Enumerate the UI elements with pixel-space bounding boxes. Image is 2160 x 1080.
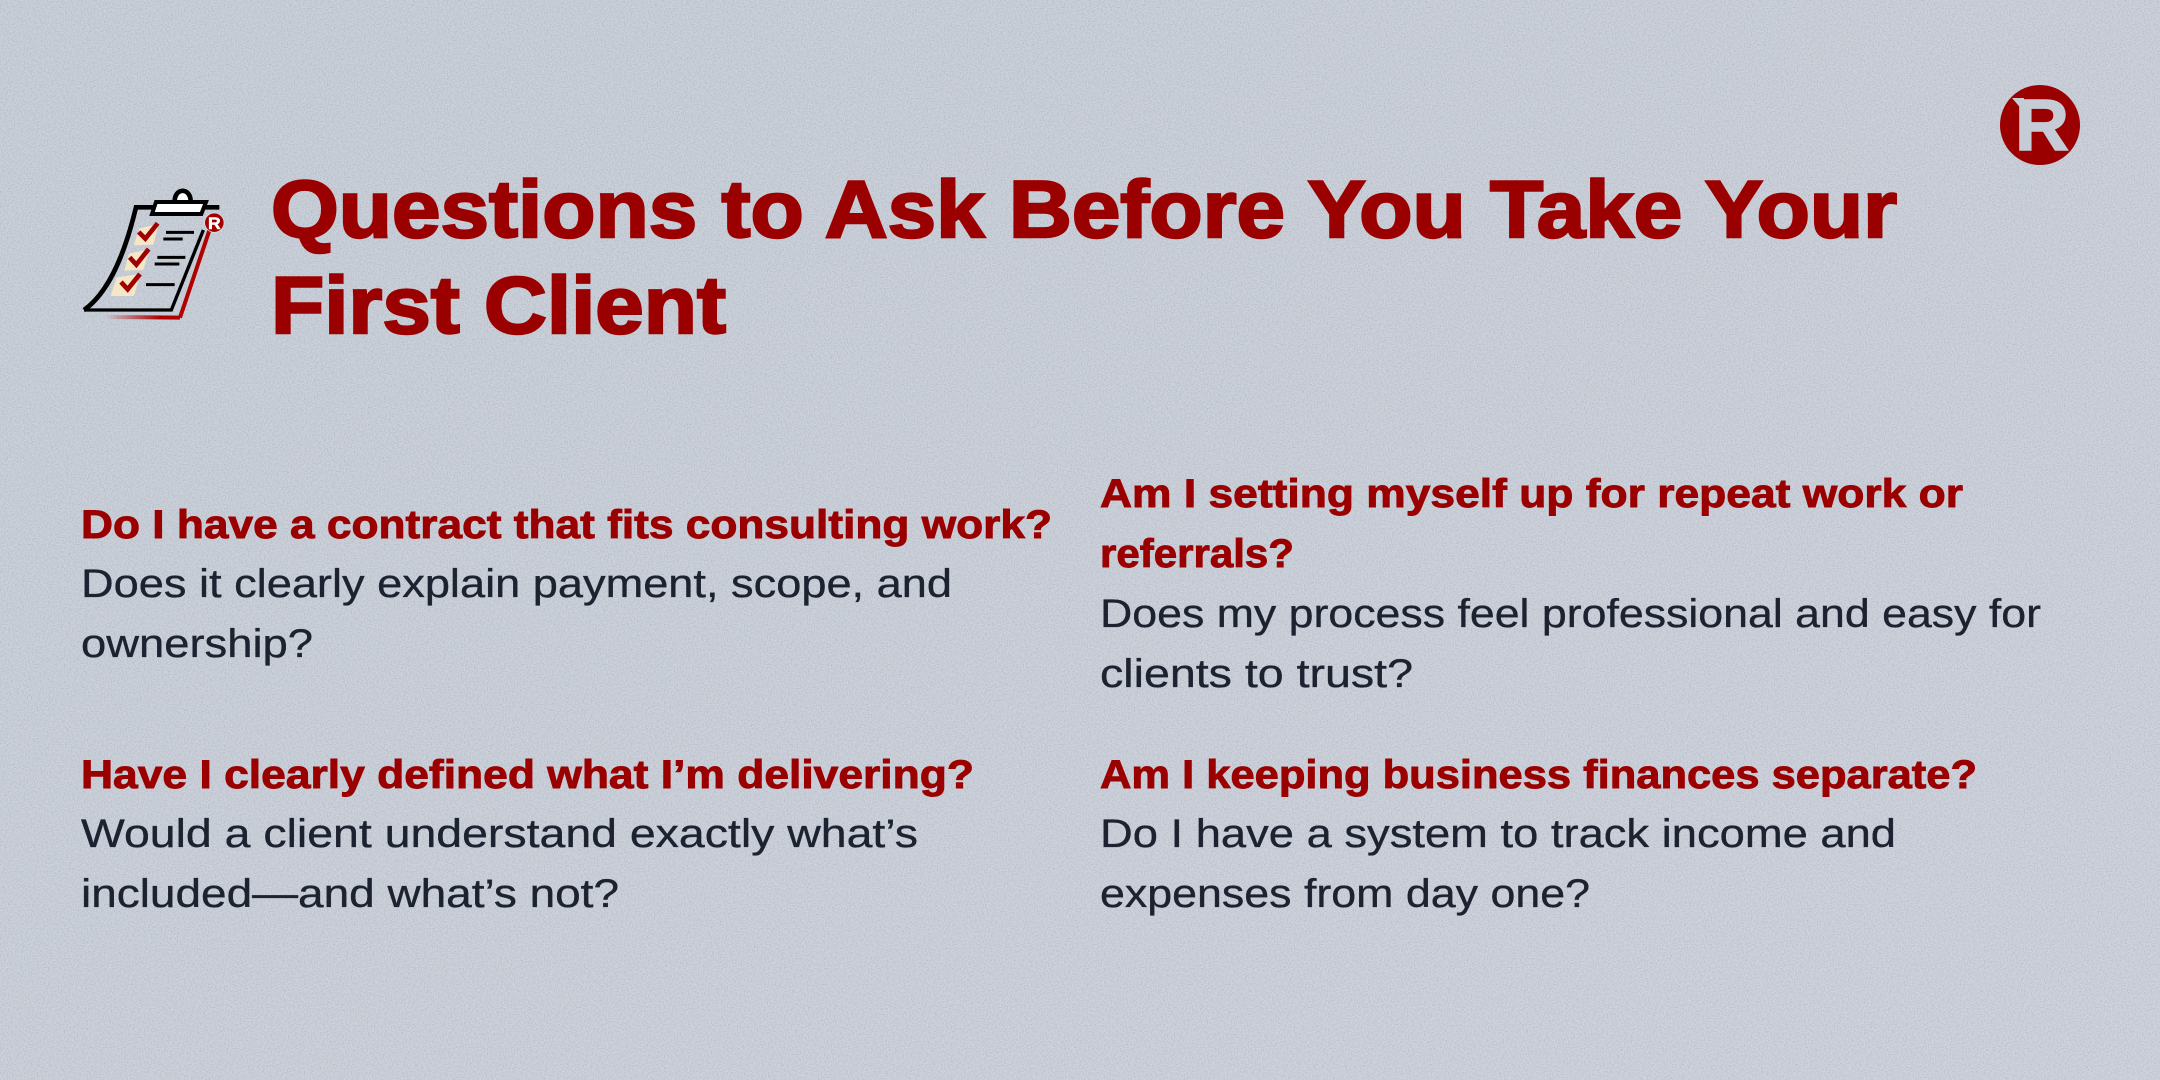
body: finances: expenses from day one? <box>1100 872 1590 916</box>
body: deliverables: included—and what’s not? <box>81 872 619 916</box>
body: repeat work: clients to trust? <box>1100 652 1413 696</box>
title: Questions to Ask Before You Take Your <box>271 165 1897 255</box>
body: repeat work <box>1100 592 2041 696</box>
body: finances: Do I have a system to track income and <box>1100 812 1896 856</box>
body: deliverables <box>81 812 918 916</box>
body: contract: Does it clearly explain payment, scope, and <box>81 562 952 606</box>
question block: contract <box>81 503 1052 666</box>
title: First Client <box>271 261 726 351</box>
icon: clipboard checklist <box>84 191 224 318</box>
body: contract: ownership? <box>81 622 313 666</box>
question block: repeat work <box>1100 472 2041 696</box>
body: repeat work: Does my process feel professional and easy for <box>1100 592 2041 636</box>
icon: clipboard checklist: R <box>208 214 221 233</box>
heading: finances: Am I keeping business finances separate? <box>1100 753 1977 797</box>
heading: repeat work: Am I setting myself up for repeat work or <box>1100 472 1963 516</box>
heading: contract: Do I have a contract that fits consulting work? <box>81 503 1052 547</box>
heading: repeat work <box>1100 472 1963 576</box>
heading: repeat work: referrals? <box>1100 532 1294 576</box>
question block: deliverables <box>81 753 974 916</box>
body: deliverables: Would a client understand exactly what’s <box>81 812 918 856</box>
question block: finances <box>1100 753 1977 916</box>
body: finances <box>1100 812 1896 916</box>
body: contract <box>81 562 952 666</box>
logo: R badge <box>2000 85 2080 166</box>
logo: R badge: R <box>2015 86 2069 166</box>
title <box>271 165 1897 351</box>
heading: deliverables: Have I clearly defined what I’m delivering? <box>81 753 974 797</box>
